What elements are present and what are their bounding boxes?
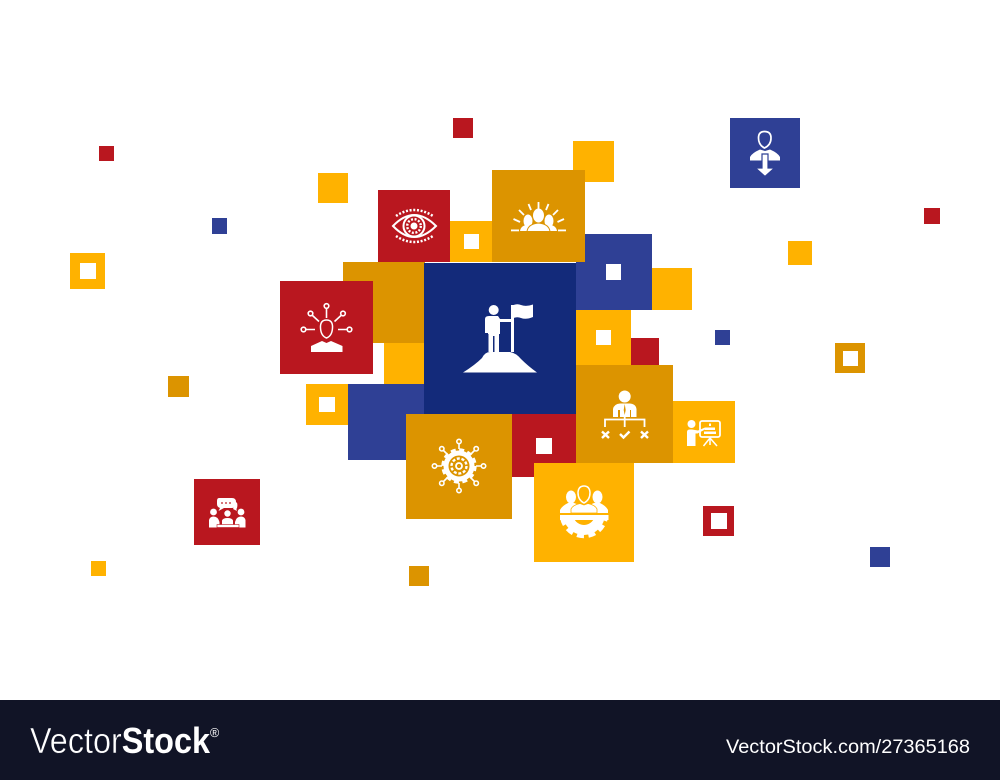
icon: person with down arrow bbox=[750, 132, 780, 176]
panel: central goal tile bbox=[424, 263, 576, 414]
tile: yellow right bbox=[652, 268, 692, 310]
tile: red with white square, below centre bbox=[512, 414, 576, 477]
panel: presentation tile bbox=[673, 401, 735, 463]
panel: team sunrise tile bbox=[492, 170, 585, 262]
backing tile: ochre bbox=[343, 262, 425, 343]
panel: team and gear tile bbox=[534, 463, 634, 562]
tile: yellow top with white square bbox=[450, 221, 493, 262]
icon: head with connected nodes bbox=[301, 304, 352, 352]
panel: gear network tile bbox=[406, 414, 512, 519]
icon: gear with nodes bbox=[432, 439, 486, 493]
hollow square: red lower right bbox=[703, 506, 734, 536]
panel: decision org-chart tile bbox=[576, 365, 673, 463]
tile: yellow with white square, right of centre bbox=[576, 310, 631, 366]
icon: eye bbox=[393, 210, 436, 242]
panel: meeting tile bbox=[194, 479, 260, 545]
registered mark: ® bbox=[210, 726, 220, 740]
hollow square: yellow left bbox=[70, 253, 105, 289]
tile: small red bbox=[631, 338, 659, 366]
icon: team meeting with speech bubble bbox=[209, 498, 246, 528]
icon: manager with decision tree bbox=[602, 390, 648, 438]
panel: eye icon tile bbox=[378, 190, 450, 262]
tile: blue right with white square bbox=[576, 234, 652, 310]
tile: yellow with white square bbox=[306, 384, 348, 425]
footer bar bbox=[0, 700, 1000, 780]
brand logo text: VectorStock bbox=[30, 720, 211, 761]
hollow square: ochre right bbox=[835, 343, 865, 373]
backing tile: blue left bbox=[348, 384, 425, 460]
image id text: VectorStock.com/27365168 bbox=[726, 736, 970, 758]
icon: person with flag on mountain bbox=[463, 304, 537, 372]
icon: people above a gear bbox=[556, 486, 612, 536]
backing tile: yellow left bbox=[384, 343, 425, 384]
icon: people with rays bbox=[511, 202, 566, 232]
scattered small squares bbox=[91, 118, 940, 586]
panel: top right person tile bbox=[730, 118, 800, 188]
panel: head network tile bbox=[280, 281, 373, 374]
icon: presenter with board bbox=[687, 420, 720, 446]
